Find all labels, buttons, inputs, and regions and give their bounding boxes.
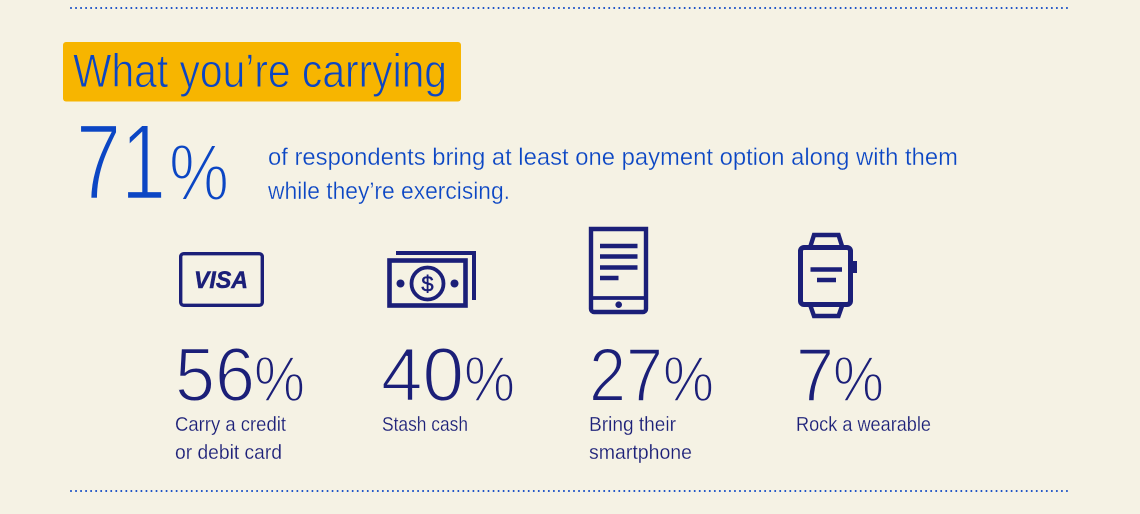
stat: 27% bring smartphone: Bring their	[589, 413, 676, 436]
stat: 7% rock a wearable: Rock a wearable	[796, 413, 931, 436]
stat: 56% carry a card: or debit card	[175, 441, 282, 464]
stat: 27% bring smartphone: smartphone	[589, 441, 692, 464]
text: 71% description: of respondents bring at least one payment option along with them	[268, 144, 958, 171]
stat: 40% stash cash: %	[464, 343, 515, 415]
stat: 56% carry a card: Carry a credit	[175, 413, 286, 436]
icon: banknotes: $	[421, 272, 434, 296]
big stat: 71%: 71	[76, 101, 166, 222]
icon: banknotes	[390, 253, 474, 306]
stat: 27% bring smartphone	[589, 333, 714, 464]
icon: smartwatch	[800, 235, 857, 316]
stat: 27% bring smartphone: %	[663, 343, 714, 415]
stat: 40% stash cash: Stash cash	[382, 413, 468, 436]
stat: 40% stash cash: 40	[381, 333, 464, 418]
stat: 7% rock a wearable: %	[833, 343, 884, 415]
stat: 56% carry a card: %	[254, 343, 305, 415]
stat: 27% bring smartphone: 27	[589, 333, 663, 418]
stat: 56% carry a card: 56	[175, 333, 255, 418]
stat: 56% carry a card	[175, 333, 305, 464]
stat: 7% rock a wearable: 7	[796, 333, 834, 418]
big stat: 71%: %	[169, 128, 229, 217]
stat: 40% stash cash	[381, 333, 515, 436]
heading: What you're carrying: What you’re carrying	[73, 44, 447, 97]
icon: Visa card	[181, 254, 262, 305]
stat: 7% rock a wearable	[796, 333, 931, 436]
icon: Visa card: VISA	[194, 267, 248, 294]
text: 71% description	[267, 144, 958, 205]
icon: smartphone	[591, 229, 646, 312]
text: 71% description: while they’re exercising.	[267, 178, 510, 205]
